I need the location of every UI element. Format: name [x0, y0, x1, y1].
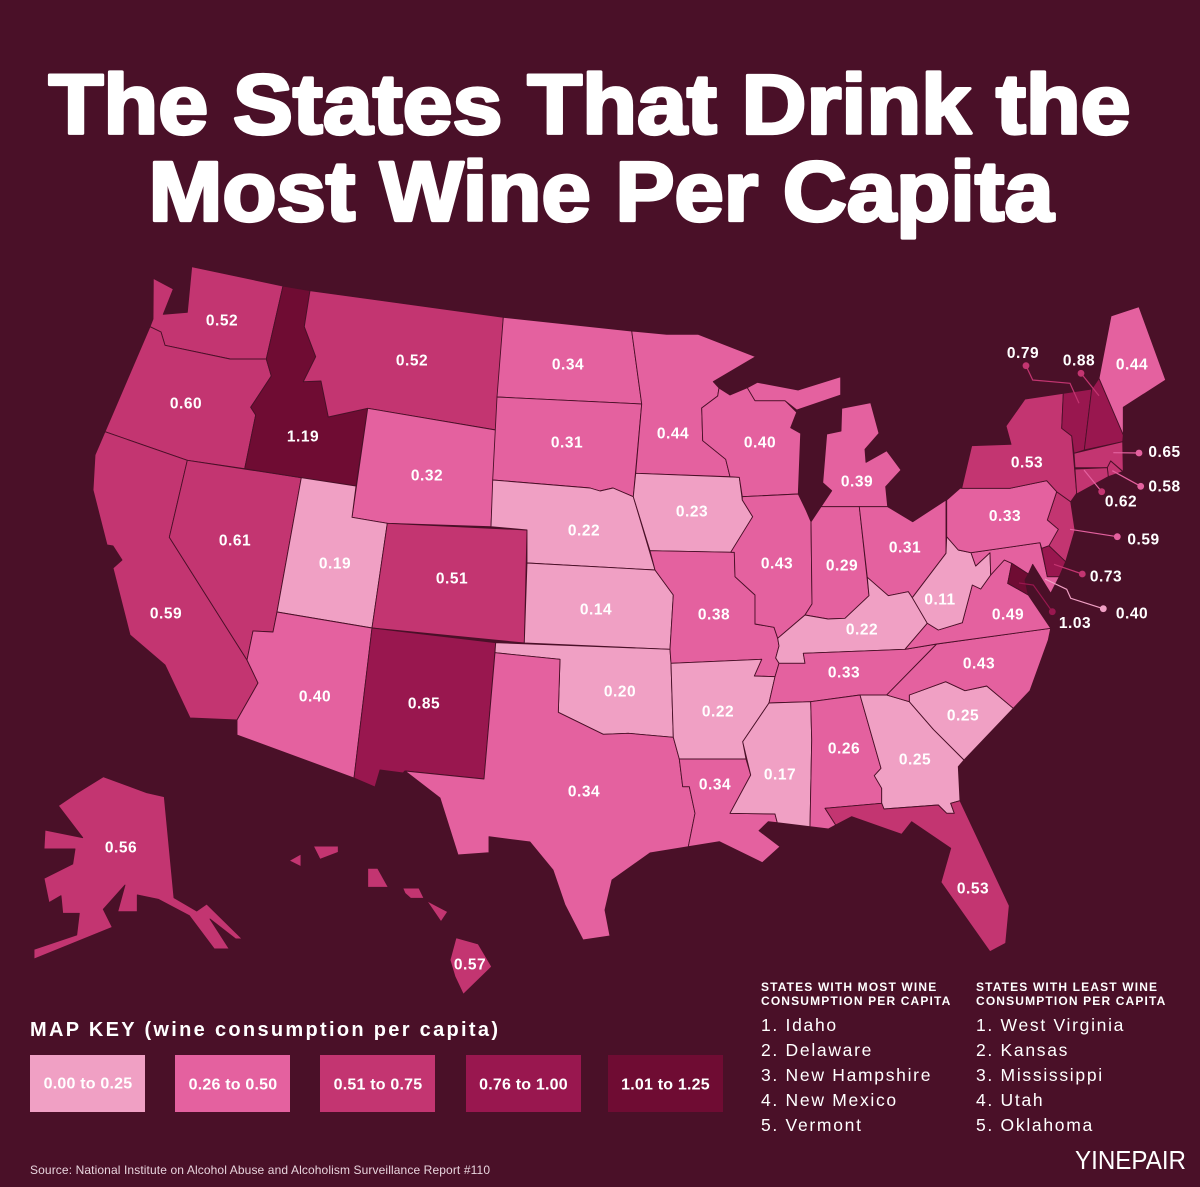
state: Oregon: 0.60 — [170, 396, 202, 412]
state: Utah — [277, 478, 387, 628]
state: Colorado: 0.51 — [436, 570, 468, 588]
state: Illinois: 0.43 — [761, 556, 793, 572]
state: Oregon — [105, 327, 271, 469]
state: Nebraska: 0.22 — [568, 522, 600, 540]
state: South Carolina — [909, 682, 1013, 760]
state: Iowa: 0.23 — [676, 504, 708, 520]
state: North Dakota: 0.34 — [552, 356, 584, 374]
state: Kansas: 0.14 — [580, 602, 612, 618]
state: Alabama: 0.26 — [828, 740, 860, 758]
state: Florida — [825, 801, 1009, 952]
map of the United States — [34, 267, 1166, 994]
list: states with least wine consumption: 3. Mississippi — [976, 1065, 1104, 1085]
map key: 0.51 to 0.75 — [320, 1055, 435, 1112]
list: states with least wine consumption: 5. Oklahoma — [976, 1115, 1094, 1135]
state: Nebraska — [491, 480, 655, 570]
state: Tennessee: 0.33 — [828, 664, 860, 682]
list: states with most wine consumption: CONSUMPTION PER CAPITA — [761, 994, 951, 1008]
state: Louisiana — [679, 759, 780, 863]
list: states with least wine consumption: STATES WITH LEAST WINE — [976, 980, 1158, 994]
state: Idaho — [245, 286, 368, 486]
map key: 0.51 to 0.75: 0.51 to 0.75 — [334, 1076, 422, 1094]
list: states with least wine consumption: 4. Utah — [976, 1090, 1044, 1110]
state: Virginia: 0.49 — [992, 606, 1024, 624]
state: New York: 0.53 — [1011, 454, 1043, 472]
callout: Rhode Island 0.58 — [1112, 471, 1181, 496]
callout: District of Columbia 1.03 — [1019, 583, 1091, 632]
state: Missouri: 0.38 — [698, 606, 730, 624]
title: Most Wine Per Capita — [149, 144, 1055, 238]
map key heading: MAP KEY (wine consumption per capita) — [30, 1019, 498, 1041]
state: Alabama — [810, 695, 882, 829]
state: California — [93, 432, 258, 720]
map key: 1.01 to 1.25 — [608, 1055, 723, 1112]
state: West Virginia: 0.11 — [924, 592, 956, 608]
list: states with most wine consumption: 1. Idaho — [761, 1015, 838, 1035]
list: states with least wine consumption — [976, 980, 1166, 1135]
state: Illinois — [731, 494, 812, 638]
state: Kentucky — [776, 577, 927, 663]
map key: 0.26 to 0.50 — [175, 1055, 290, 1112]
state: Kentucky: 0.22 — [846, 622, 878, 638]
callout: New Jersey 0.59 — [1070, 529, 1160, 548]
state: Georgia — [860, 695, 964, 813]
state: Connecticut — [1075, 468, 1108, 494]
state: Mississippi: 0.17 — [764, 766, 796, 784]
state: Nevada — [169, 460, 301, 660]
source note: Source: National Institute on Alcohol Abuse and Alcoholism Surveillance Report #110 — [30, 1163, 490, 1177]
state: Arizona — [237, 612, 372, 778]
state: Hawaii — [289, 846, 492, 994]
state: Nevada: 0.61 — [219, 532, 251, 550]
callout: Massachusetts 0.65 — [1113, 444, 1181, 461]
state: Idaho: 1.19 — [287, 428, 319, 446]
state: New Jersey — [1047, 492, 1075, 562]
state: Michigan — [821, 403, 901, 507]
state: Michigan: 0.39 — [841, 474, 873, 490]
state: Montana — [303, 291, 503, 430]
state: Indiana — [805, 507, 869, 619]
state: Ohio — [859, 500, 946, 598]
state: Maine: 0.44 — [1116, 356, 1148, 374]
state: Georgia: 0.25 — [899, 752, 931, 768]
state: Tennessee — [769, 644, 937, 703]
callout: New Jersey 0.59: 0.59 — [1127, 532, 1160, 548]
list: states with least wine consumption: 2. Kansas — [976, 1040, 1069, 1060]
map key: 1.01 to 1.25: 1.01 to 1.25 — [621, 1076, 710, 1094]
state: South Dakota: 0.31 — [551, 434, 583, 452]
state: Ohio: 0.31 — [889, 540, 921, 556]
title: The States That Drink the — [49, 57, 1131, 151]
state: Texas — [405, 653, 695, 940]
state: Wyoming — [352, 408, 496, 527]
state: Rhode Island — [1107, 461, 1123, 477]
state: West Virginia — [912, 537, 991, 630]
state: North Carolina — [887, 628, 1051, 708]
state: Iowa — [633, 473, 753, 552]
map key: 0.76 to 1.00 — [466, 1055, 581, 1112]
state: Indiana: 0.29 — [826, 558, 858, 574]
state: Washington — [150, 267, 283, 359]
callout: District of Columbia 1.03: 1.03 — [1059, 615, 1091, 632]
state: Wyoming: 0.32 — [411, 468, 443, 484]
state: Michigan upper peninsula — [747, 377, 841, 410]
state: California: 0.59 — [150, 606, 182, 622]
state: Utah: 0.19 — [319, 556, 351, 572]
state: Colorado — [372, 523, 527, 643]
state: Delaware — [1042, 546, 1066, 577]
list: states with most wine consumption — [761, 980, 951, 1135]
state: Texas: 0.34 — [568, 784, 600, 800]
logo: VinePair: YINEPAIR — [1075, 1145, 1186, 1175]
state: Oklahoma: 0.20 — [604, 684, 636, 700]
list: states with most wine consumption: STATES WITH MOST WINE — [761, 980, 937, 994]
state: Arkansas — [671, 659, 775, 759]
state: Hawaii: 0.57 — [454, 956, 486, 974]
state: North Carolina: 0.43 — [963, 656, 995, 672]
callout: Connecticut 0.62 — [1084, 470, 1137, 510]
list: states with most wine consumption: 5. Vermont — [761, 1115, 863, 1135]
state: New Hampshire — [1084, 378, 1123, 450]
callout: Rhode Island 0.58: 0.58 — [1148, 478, 1181, 496]
state: Arizona: 0.40 — [299, 688, 331, 706]
state: Pennsylvania: 0.33 — [989, 508, 1021, 525]
callout: Vermont 0.79: 0.79 — [1007, 345, 1039, 362]
list: states with most wine consumption: 4. New Mexico — [761, 1090, 898, 1110]
state: New York — [962, 393, 1077, 502]
callout: Vermont 0.79 — [1007, 345, 1079, 403]
state: Alaska — [34, 777, 242, 959]
state: Missouri — [650, 551, 779, 677]
state: Maryland — [971, 543, 1059, 593]
state: New Mexico: 0.85 — [408, 696, 440, 712]
state: Vermont — [1062, 389, 1092, 453]
state: Arkansas: 0.22 — [702, 704, 734, 720]
state: Wisconsin — [702, 388, 801, 497]
state: Oklahoma — [495, 643, 673, 737]
state: Louisiana: 0.34 — [699, 776, 731, 794]
state: Washington: 0.52 — [206, 312, 238, 330]
state: Minnesota: 0.44 — [657, 426, 689, 442]
map key: 0.00 to 0.25: 0.00 to 0.25 — [44, 1076, 132, 1092]
callout: Delaware 0.73: 0.73 — [1090, 568, 1122, 586]
list: states with most wine consumption: 2. Delaware — [761, 1040, 873, 1060]
map key: 0.26 to 0.50: 0.26 to 0.50 — [189, 1076, 277, 1094]
title — [49, 57, 1131, 238]
callout: Delaware 0.73 — [1054, 564, 1122, 586]
callout: Maryland 0.40 — [1045, 579, 1148, 622]
callout: New Hampshire 0.88 — [1063, 352, 1099, 396]
state: Kansas — [524, 563, 673, 649]
state: Pennsylvania — [947, 481, 1058, 553]
state: New Mexico — [354, 628, 496, 787]
state: Virginia — [905, 560, 1051, 649]
state: Massachusetts — [1074, 442, 1123, 472]
state: South Dakota — [493, 397, 642, 497]
state: North Dakota — [497, 317, 642, 404]
map key: 0.00 to 0.25 — [30, 1055, 145, 1112]
list: states with least wine consumption: CONSUMPTION PER CAPITA — [976, 994, 1166, 1008]
state: Wisconsin: 0.40 — [744, 434, 776, 452]
state: Alaska: 0.56 — [105, 840, 137, 856]
callout: Maryland 0.40: 0.40 — [1116, 606, 1148, 622]
list: states with least wine consumption: 1. West Virginia — [976, 1015, 1125, 1035]
state: Montana: 0.52 — [396, 352, 428, 370]
state: Florida: 0.53 — [957, 880, 989, 898]
list: states with most wine consumption: 3. New Hampshire — [761, 1065, 932, 1085]
callout: Connecticut 0.62: 0.62 — [1105, 494, 1137, 510]
state: South Carolina: 0.25 — [947, 708, 979, 724]
map key: 0.76 to 1.00: 0.76 to 1.00 — [479, 1076, 568, 1094]
callout: Massachusetts 0.65: 0.65 — [1148, 444, 1181, 461]
callout: New Hampshire 0.88: 0.88 — [1063, 352, 1095, 370]
state: District of Columbia — [1008, 563, 1028, 595]
state: Maine — [1099, 307, 1166, 435]
state: Minnesota — [632, 331, 756, 477]
state: Mississippi — [730, 702, 812, 827]
